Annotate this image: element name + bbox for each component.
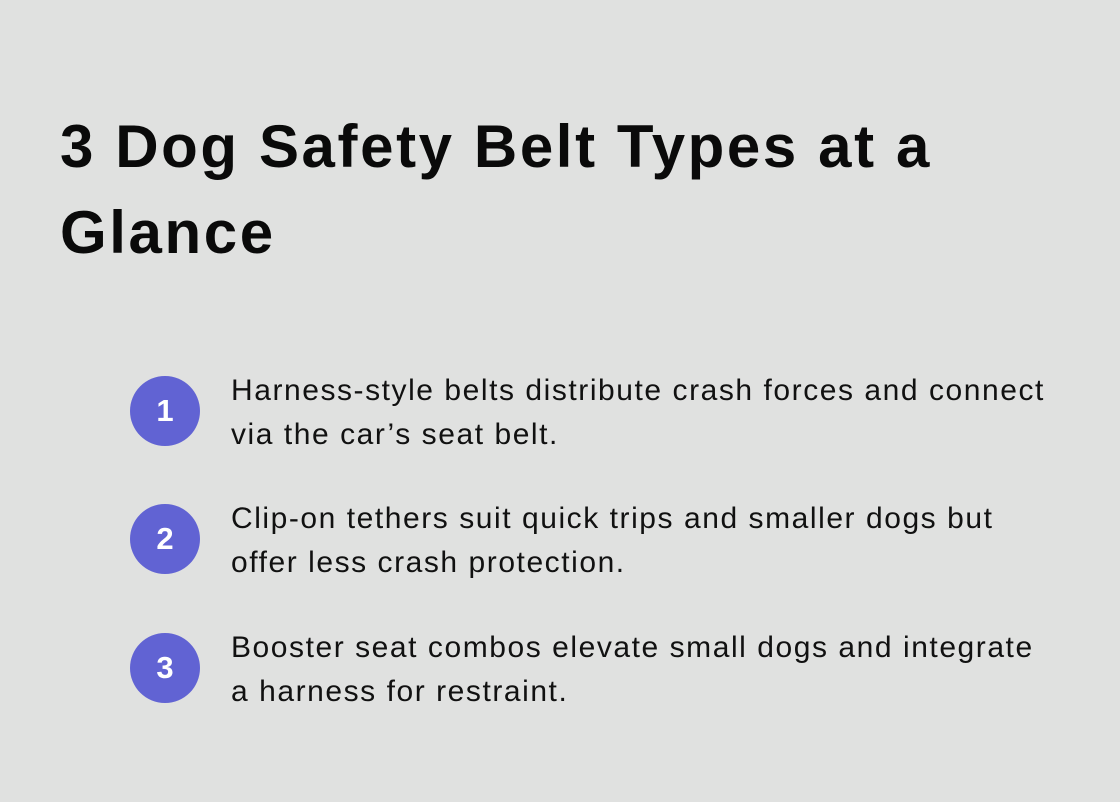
title: Glance: [60, 199, 276, 266]
title: 3 Dog Safety Belt Types at a: [60, 113, 932, 180]
item 1 text: Harness-style belts distribute crash forces and connect: [231, 374, 1045, 407]
number badge 2: 2: [156, 521, 174, 556]
number badge 2: [130, 504, 200, 574]
item 2 text: Clip-on tethers suit quick trips and smaller dogs but: [231, 502, 993, 535]
number badge 3: 3: [156, 650, 174, 685]
item 2 text: [231, 502, 993, 579]
title: [60, 113, 932, 266]
number badge 1: [130, 376, 200, 446]
item 1 text: [231, 374, 1045, 451]
list item 2: [130, 502, 993, 579]
list item 3: [130, 631, 1034, 708]
number badge 1: 1: [156, 393, 174, 428]
item 3 text: a harness for restraint.: [231, 675, 568, 708]
number badge 3: [130, 633, 200, 703]
list item 1: [130, 374, 1045, 451]
item 2 text: offer less crash protection.: [231, 546, 626, 579]
item 3 text: Booster seat combos elevate small dogs and integrate: [231, 631, 1034, 664]
item 1 text: via the car’s seat belt.: [231, 418, 559, 451]
item 3 text: [231, 631, 1034, 708]
